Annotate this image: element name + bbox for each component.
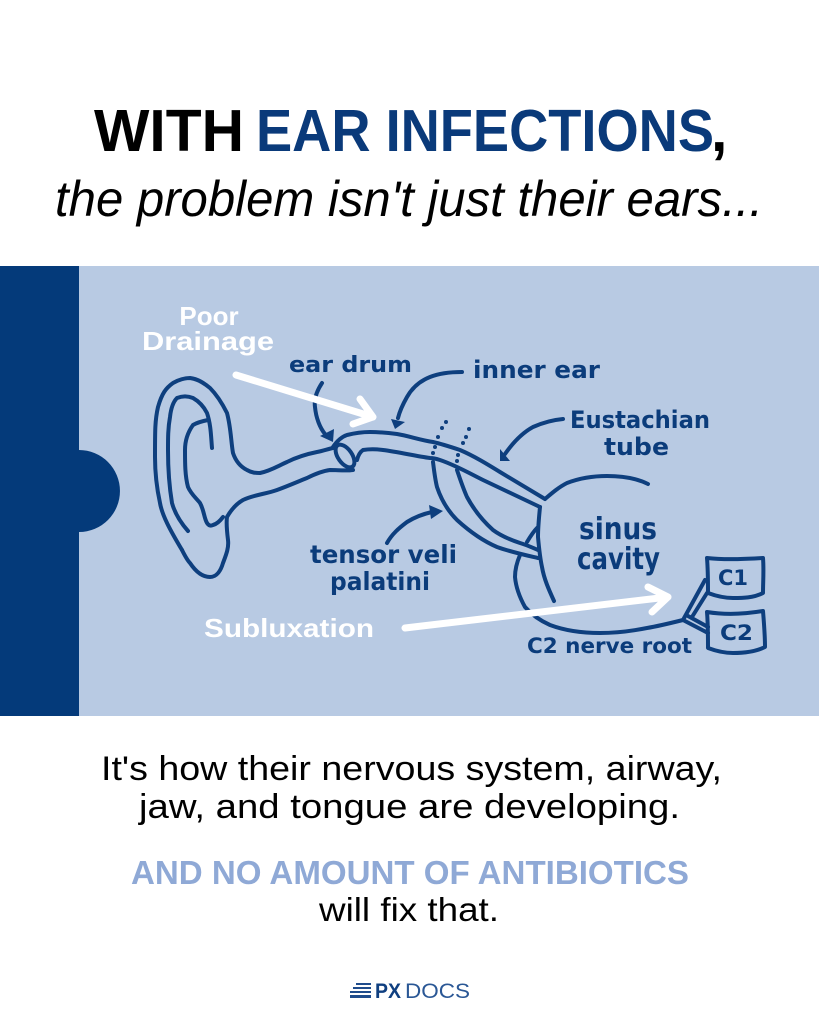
ear and tube drawing [155, 378, 708, 633]
title: the problem isn't just their ears... [55, 171, 763, 227]
label: sinus cavity: sinus [579, 512, 657, 547]
label: ear drum: ear drum [289, 353, 412, 378]
arrow: tensor veli palatini [387, 505, 443, 543]
arrow: inner ear [391, 372, 462, 429]
logo: PX Docs: PX [375, 980, 401, 1003]
label: Poor Drainage: Poor [179, 301, 239, 331]
body text [101, 750, 722, 826]
arrow: Subluxation [405, 587, 668, 628]
callout: antibiotics [131, 854, 689, 928]
box: C2 [707, 611, 765, 653]
label: Eustachian tube: tube [604, 433, 669, 461]
callout: antibiotics: will fix that. [318, 891, 499, 928]
label: Subluxation: Subluxation [204, 613, 374, 643]
box: C1: C1 [718, 566, 748, 590]
body text: jaw, and tongue are developing. [138, 788, 680, 826]
box: C2: C2 [720, 621, 753, 645]
label: C2 nerve root: C2 nerve root [527, 634, 692, 658]
label: Poor Drainage: Drainage [142, 326, 274, 356]
title [55, 98, 763, 227]
label: tensor veli palatini [310, 540, 457, 596]
label: Eustachian tube [570, 406, 710, 461]
body text: It's how their nervous system, airway, [101, 750, 722, 788]
label: tensor veli palatini: palatini [330, 567, 430, 596]
dotted lines [431, 420, 471, 463]
label: inner ear: inner ear [473, 356, 600, 384]
arrow: ear drum [315, 383, 334, 442]
title: , [711, 98, 727, 164]
arrow: Poor Drainage [236, 375, 373, 424]
arrow: Eustachian tube [500, 419, 563, 461]
panel: ear anatomy diagram [0, 266, 819, 716]
label: sinus cavity: cavity [577, 542, 660, 577]
title: WITH [94, 98, 244, 164]
label: tensor veli palatini: tensor veli [310, 540, 457, 569]
title: EAR INFECTIONS [256, 98, 714, 164]
label: sinus cavity [577, 512, 660, 577]
puzzle tab sidebar [0, 266, 120, 716]
callout: antibiotics: AND NO AMOUNT OF ANTIBIOTICS [131, 854, 689, 891]
box: C1 [707, 558, 763, 598]
label: Poor Drainage [142, 301, 274, 356]
label: Eustachian tube: Eustachian [570, 406, 710, 434]
logo: PX Docs: DOCS [405, 980, 470, 1003]
logo: PX Docs [350, 980, 470, 1003]
